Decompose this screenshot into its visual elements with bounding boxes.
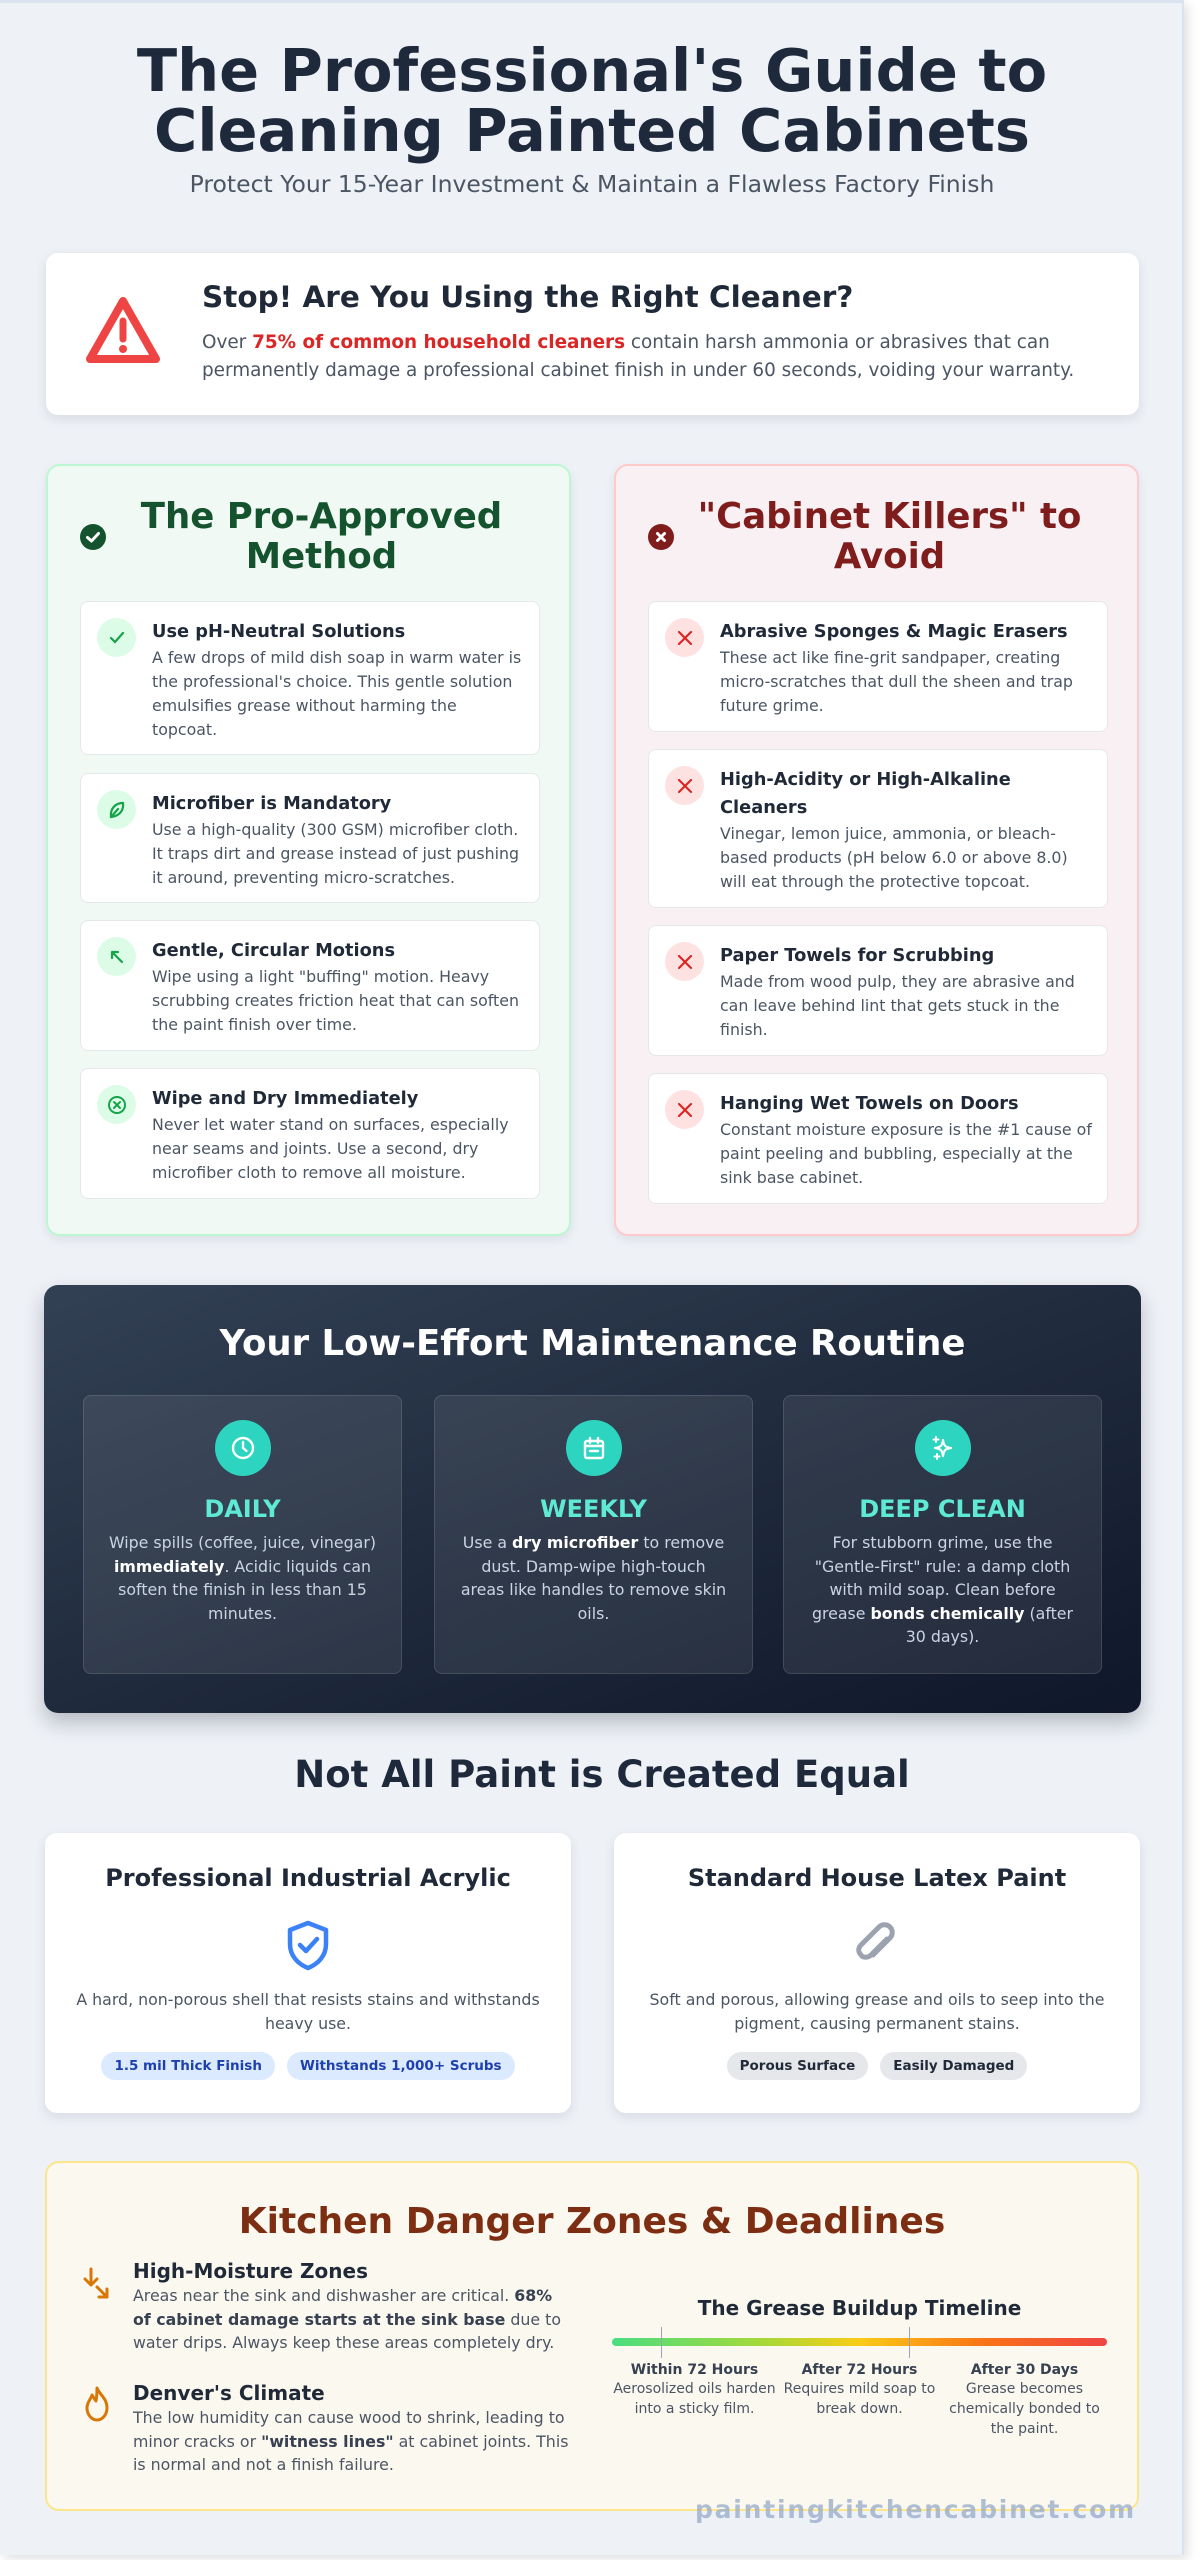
timeline heading: The Grease Buildup Timeline (698, 2296, 1021, 2320)
pills: Porous Surface (740, 2058, 855, 2074)
alert text: Over 75% of common household cleaners contain harsh ammonia or abrasives that can permanently damage a professional cabinet finish in under 60 seconds, voiding your warranty. (202, 332, 1074, 381)
item: dry immediately: Never let water stand on surfaces, especially near seams and joints. Use a second, dry microfiber cloth to remove all moisture. (152, 1115, 509, 1182)
icon: clock (214, 1420, 270, 1476)
timeline: after 30 days: After 30 Days (971, 2362, 1078, 2378)
pills: 1.5 mil Thick Finish (114, 2058, 262, 2074)
item: microfiber: Microfiber is Mandatory (152, 793, 391, 814)
item: paper towels: Paper Towels for Scrubbing (720, 945, 994, 966)
panel heading: Method (246, 536, 397, 577)
card: deep clean: For stubborn grime, use the "Gentle-First" rule: a damp cloth with mild soap. Clean before grease bonds chemically (after 30 days). (812, 1533, 1073, 1646)
card: deep clean (783, 1395, 1102, 1674)
timeline: within 72 hours: Within 72 Hours (631, 2362, 758, 2378)
panel: cabinet killers (614, 464, 1139, 1236)
icon: paperclip (856, 1922, 895, 1960)
title: The Professional's Guide to (137, 36, 1047, 105)
item: pH neutral (80, 601, 540, 755)
timeline: within 72 hours (613, 2362, 776, 2417)
timeline: after 72 hours (784, 2362, 935, 2417)
card: professional acrylic (45, 1833, 571, 2113)
item: acidity: High-Acidity or High-Alkaline Cleaners (720, 769, 1011, 818)
card: professional acrylic: A hard, non-porous shell that resists stains and withstands heavy use. (76, 1990, 540, 2032)
timeline: within 72 hours: Aerosolized oils harden into a sticky film. (613, 2381, 776, 2417)
danger heading: Kitchen Danger Zones & Deadlines (239, 2201, 945, 2242)
panel heading (648, 496, 1081, 577)
item: microfiber: Use a high-quality (300 GSM) microfiber cloth. It traps dirt and grease instead of just pushing it around, preventing micro-scratches. (152, 820, 519, 887)
text: high moisture: Areas near the sink and dishwasher are critical. 68% of cabinet damage starts at the sink base due to water drips. Always keep these areas completely dry. (133, 2286, 561, 2352)
timeline: after 72 hours: After 72 Hours (802, 2362, 917, 2378)
card: house latex: Standard House Latex Paint (688, 1864, 1066, 1892)
card: weekly: WEEKLY (540, 1495, 647, 1523)
item: circular motions (80, 920, 540, 1051)
item: wet towels: Hanging Wet Towels on Doors (720, 1093, 1019, 1114)
card: daily: DAILY (204, 1495, 281, 1523)
title: Cleaning Painted Cabinets (154, 96, 1030, 165)
watermark: paintingkitchencabinet.com (695, 2495, 1136, 2524)
item: wet towels (648, 1073, 1108, 1204)
item: abrasive sponges: Abrasive Sponges & Magic Erasers (720, 621, 1068, 642)
icon: shield (288, 1920, 328, 1970)
item: circular motions: Wipe using a light "buffing" motion. Heavy scrubbing creates friction heat that can soften the paint finish over time. (152, 967, 519, 1034)
item: abrasive sponges (648, 601, 1108, 732)
card: professional acrylic: Professional Industrial Acrylic (105, 1864, 511, 1892)
alert card (46, 253, 1139, 415)
item: paper towels (648, 925, 1108, 1056)
icon: moisture arrows (83, 2268, 109, 2299)
card: daily: Wipe spills (coffee, juice, vinegar) immediately. Acidic liquids can soften the finish in less than 15 minutes. (109, 1533, 376, 1622)
card: daily (83, 1395, 402, 1674)
item: paper towels: Made from wood pulp, they are abrasive and can leave behind lint that gets stuck in the finish. (720, 972, 1075, 1039)
text: high moisture: High-Moisture Zones (133, 2259, 368, 2283)
pills: Easily Damaged (893, 2058, 1014, 2074)
card: weekly (434, 1395, 753, 1674)
panel: kitchen danger zones (45, 2161, 1139, 2511)
alert heading: Stop! Are You Using the Right Cleaner? (202, 280, 853, 314)
item: pH neutral: A few drops of mild dish soap in warm water is the professional's choice. This gentle solution emulsifies grease without harming the topcoat. (152, 648, 521, 739)
timeline bar (612, 2338, 1107, 2346)
text: denver climate: Denver's Climate (133, 2381, 325, 2405)
panel heading: Avoid (834, 536, 945, 577)
panel heading: "Cabinet Killers" to (698, 496, 1081, 537)
card: weekly: Use a dry microfiber to remove dust. Damp-wipe high-touch areas like handles to remove skin oils. (461, 1533, 726, 1622)
panel heading (80, 496, 502, 577)
panel: pro-approved method (46, 464, 571, 1236)
panel: maintenance routine (44, 1285, 1141, 1713)
icon: flame (86, 2386, 108, 2422)
item: dry immediately (80, 1068, 540, 1199)
subtitle: Protect Your 15-Year Investment & Maintain a Flawless Factory Finish (190, 170, 994, 198)
card: deep clean: DEEP CLEAN (859, 1495, 1026, 1523)
paint heading: Not All Paint is Created Equal (294, 1753, 910, 1796)
text: denver climate: The low humidity can cause wood to shrink, leading to minor cracks or "witness lines" at cabinet joints. This is normal and not a finish failure. (133, 2408, 568, 2474)
timeline: after 72 hours: Requires mild soap to break down. (784, 2381, 935, 2417)
item: wet towels: Constant moisture exposure is the #1 cause of paint peeling and bubbling, especially at the sink base cabinet. (720, 1120, 1092, 1187)
icon: warning triangle (86, 297, 160, 363)
card: house latex (614, 1833, 1140, 2113)
routine heading: Your Low-Effort Maintenance Routine (220, 1323, 966, 1364)
item: dry immediately: Wipe and Dry Immediately (152, 1088, 418, 1109)
pills (101, 2052, 515, 2080)
pills: Withstands 1,000+ Scrubs (300, 2058, 502, 2074)
icon: sparkles (914, 1420, 970, 1476)
pills (727, 2052, 1027, 2080)
item: microfiber (80, 773, 540, 903)
item: abrasive sponges: These act like fine-grit sandpaper, creating micro-scratches that dull the sheen and trap future grime. (720, 648, 1073, 715)
card: house latex: Soft and porous, allowing grease and oils to seep into the pigment, causing permanent stains. (650, 1990, 1104, 2032)
item: circular motions: Gentle, Circular Motions (152, 940, 395, 961)
icon: calendar (566, 1420, 622, 1476)
item: pH neutral: Use pH-Neutral Solutions (152, 621, 405, 642)
item: acidity (648, 749, 1108, 908)
item: acidity: Vinegar, lemon juice, ammonia, or bleach-based products (pH below 6.0 or above 8.0) will eat through the protective topcoat. (720, 824, 1068, 891)
panel heading: The Pro-Approved (141, 496, 502, 537)
timeline: after 30 days: Grease becomes chemically bonded to the paint. (949, 2381, 1100, 2437)
title (137, 36, 1047, 165)
